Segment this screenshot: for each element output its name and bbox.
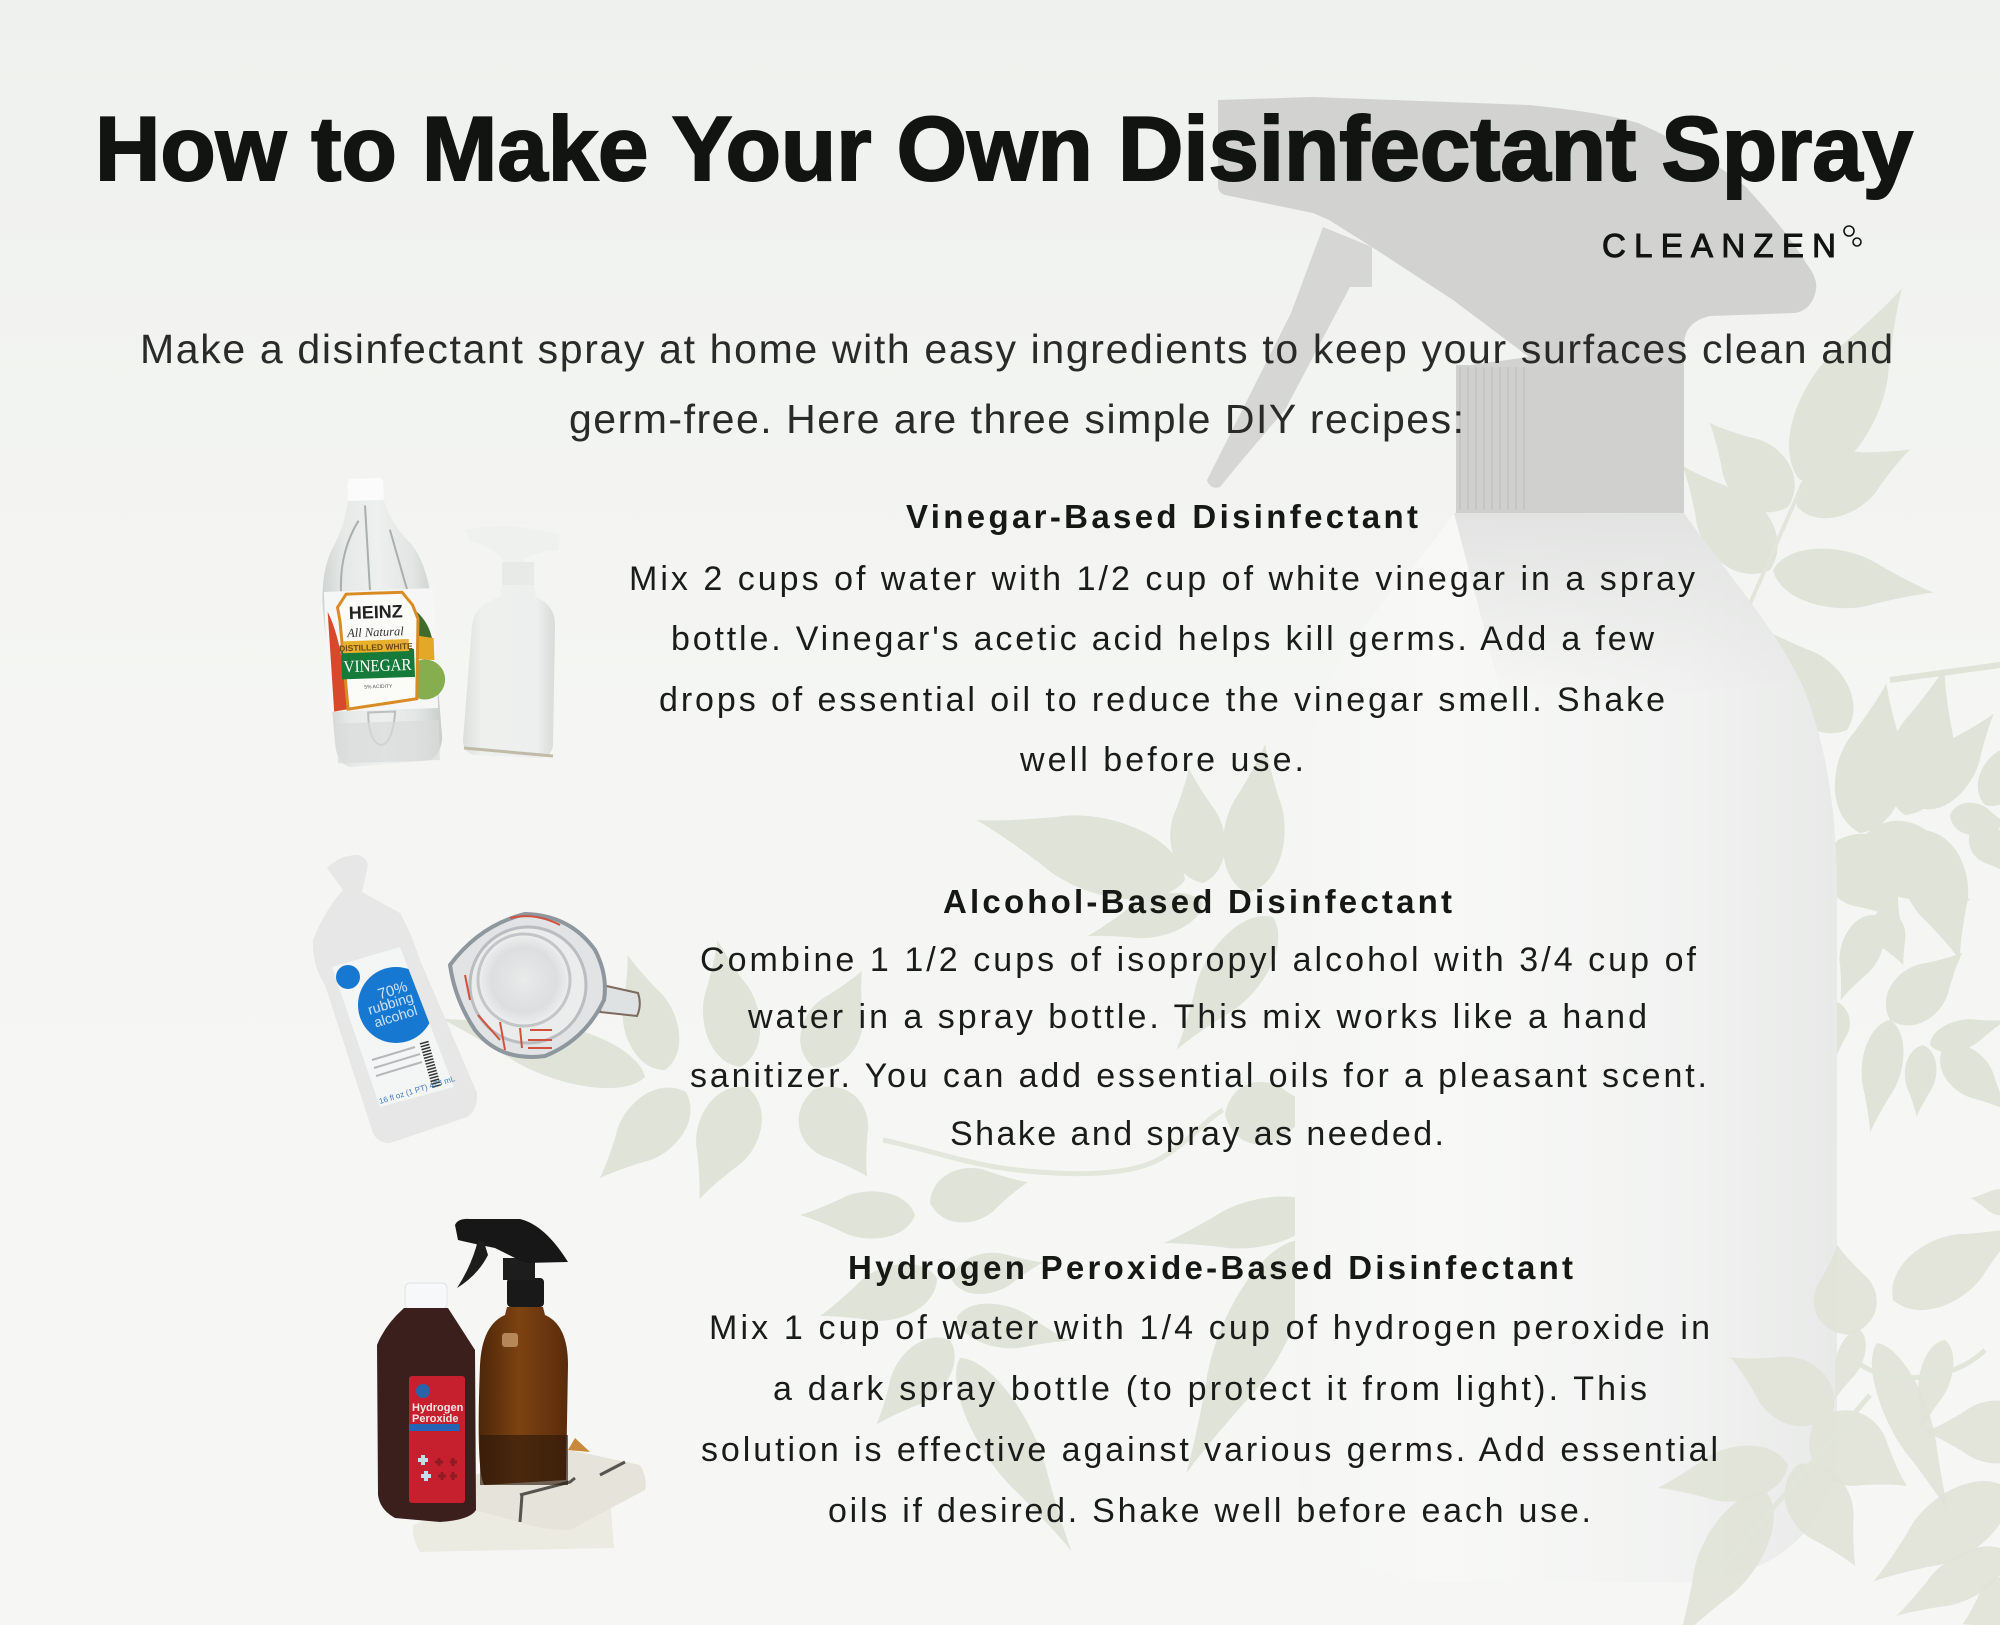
body text bbox=[690, 941, 1707, 1153]
body text: bottle. Vinegar's acetic acid helps kill germs. Add a few bbox=[671, 620, 1654, 658]
body text: Mix 2 cups of water with 1/2 cup of white vinegar in a spray bbox=[629, 560, 1695, 598]
icon: vinegar bottle: HEINZ bbox=[348, 601, 403, 623]
image: vinegar and glass spray bottle bbox=[318, 476, 560, 768]
body text: drops of essential oil to reduce the vinegar smell. Shake bbox=[659, 681, 1665, 719]
icon: vinegar bottle: All Natural bbox=[346, 624, 404, 640]
recipe: vinegar-based bbox=[629, 498, 1695, 779]
body text: well before use. bbox=[1019, 741, 1304, 779]
icon: vinegar bottle bbox=[318, 476, 448, 768]
body text: sanitizer. You can add essential oils for a pleasant scent. bbox=[690, 1057, 1707, 1095]
icon: vinegar bottle: DISTILLED WHITE bbox=[339, 641, 413, 653]
recipe: hydrogen peroxide-based bbox=[701, 1249, 1718, 1530]
icon: rubbing alcohol bottle bbox=[313, 855, 477, 1143]
bottle cap bbox=[1456, 365, 1684, 513]
icon: hydrogen peroxide bottle: Hydrogen bbox=[412, 1402, 464, 1414]
heading: Vinegar-Based Disinfectant bbox=[906, 498, 1418, 535]
body text: water in a spray bottle. This mix works like a hand bbox=[747, 998, 1647, 1036]
icon: measuring cup bbox=[450, 914, 640, 1057]
intro text: germ-free. Here are three simple DIY recipes: bbox=[569, 396, 1464, 442]
icon: hydrogen peroxide bottle: Peroxide bbox=[412, 1413, 458, 1425]
icon: rubbing alcohol bottle: 16 fl oz (1 PT) 473 mL bbox=[378, 1074, 457, 1106]
body text: a dark spray bottle (to protect it from light). This bbox=[773, 1370, 1647, 1408]
body text bbox=[701, 1309, 1718, 1530]
body text: Combine 1 1/2 cups of isopropyl alcohol with 3/4 cup of bbox=[700, 941, 1697, 979]
image: hydrogen peroxide and amber spray bottle bbox=[377, 1219, 646, 1552]
bottle body bbox=[1295, 513, 1837, 1582]
body text: Mix 1 cup of water with 1/4 cup of hydrogen peroxide in bbox=[709, 1309, 1710, 1347]
intro text bbox=[140, 326, 1893, 442]
icon: rubbing alcohol bottle: 70% bbox=[376, 978, 410, 1003]
body text: Shake and spray as needed. bbox=[950, 1115, 1444, 1153]
body text: oils if desired. Shake well before each use. bbox=[828, 1492, 1591, 1530]
background: spray bottle bbox=[1207, 97, 1837, 1582]
icon: vinegar bottle: VINEGAR bbox=[343, 655, 412, 676]
icon: hydrogen peroxide bottle bbox=[377, 1283, 476, 1522]
icon: vinegar bottle: 5% ACIDITY bbox=[364, 684, 393, 691]
image: rubbing alcohol and measuring cup bbox=[313, 855, 640, 1143]
icon: amber spray bottle bbox=[455, 1219, 568, 1485]
sprayer trigger bbox=[1207, 227, 1372, 488]
sprayer head bbox=[1218, 97, 1816, 367]
logo: Cleanzen: CLEANZEN bbox=[1602, 227, 1836, 264]
icon: rubbing alcohol bottle: rubbing bbox=[366, 989, 415, 1018]
recipe: alcohol-based bbox=[690, 883, 1707, 1153]
title: How to Make Your Own Disinfectant Spray bbox=[95, 99, 1913, 200]
background: leaves over bottle bbox=[1653, 1185, 2000, 1625]
body text bbox=[629, 560, 1695, 779]
body text: solution is effective against various germs. Add essential bbox=[701, 1431, 1718, 1469]
icon: folded towels bbox=[413, 1438, 646, 1552]
icon: rubbing alcohol bottle: alcohol bbox=[372, 1002, 419, 1030]
icon: empty glass spray bottle bbox=[463, 526, 560, 758]
background: leaves behind bottle bbox=[433, 271, 2000, 1564]
heading: Alcohol-Based Disinfectant bbox=[943, 883, 1452, 920]
heading: Hydrogen Peroxide-Based Disinfectant bbox=[848, 1249, 1573, 1286]
intro text: Make a disinfectant spray at home with easy ingredients to keep your surfaces clean and bbox=[140, 326, 1893, 372]
